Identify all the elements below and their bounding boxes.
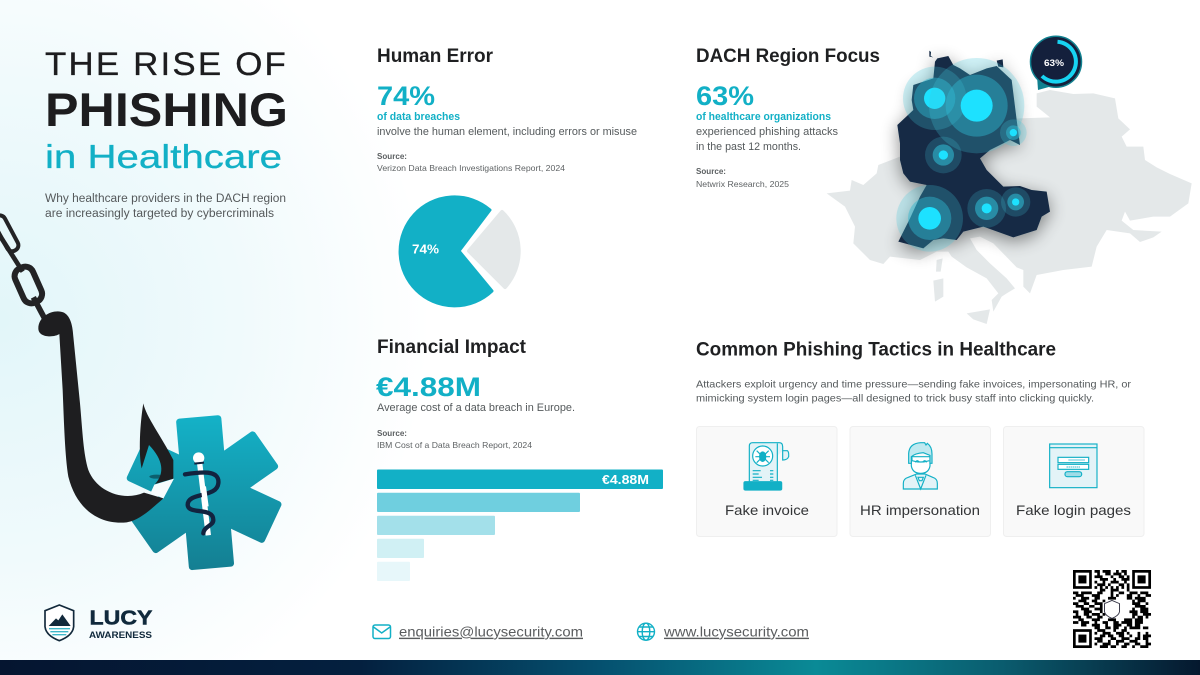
title: in Healthcare (45, 138, 282, 175)
stat: 63% (696, 81, 754, 111)
source: IBM Cost of a Data Breach Report, 2024 (377, 440, 532, 450)
card: fake invoice (696, 426, 837, 536)
source: Netwrix Research, 2025 (696, 179, 789, 189)
panel: financial impact (376, 337, 663, 581)
hotspot 3 (1000, 119, 1027, 146)
footer gradient bar (0, 660, 1200, 675)
QR code (1073, 571, 1151, 647)
chain (0, 213, 52, 332)
description: Attackers exploit urgency and time pressure—sending fake invoices, impersonating HR, or (696, 379, 1132, 391)
grey Europe (827, 90, 1192, 312)
source: Source: (696, 166, 726, 176)
panel: human error (377, 46, 637, 306)
hotspot 5 (896, 185, 963, 252)
stat: 74% (377, 81, 435, 111)
panel: DACH region focus (696, 46, 880, 189)
contact: website: www.lucysecurity.com (663, 624, 809, 640)
label: HR impersonation (860, 502, 980, 518)
bar chart: €4.88M (602, 473, 649, 487)
description: mimicking system login pages—all designed to trick busy staff into clicking quickly. (696, 393, 1094, 405)
icon: envelope (373, 625, 390, 638)
hotspot 6 (967, 189, 1006, 228)
icon: person in suit (903, 443, 937, 489)
panel: common phishing tactics (696, 340, 1144, 536)
Sicily (967, 309, 990, 324)
subtitle (45, 193, 286, 220)
title: THE RISE OF (45, 46, 288, 82)
logo: Lucy Awareness (45, 605, 153, 641)
map: Europe with DACH highlighted (827, 51, 1192, 324)
subtitle: Why healthcare providers in the DACH region (45, 193, 286, 205)
contact: email: enquiries@lucysecurity.com (399, 624, 583, 640)
stat label: of healthcare organizations (696, 111, 831, 123)
description: involve the human element, including errors or misuse (377, 126, 637, 138)
hook (38, 311, 163, 523)
source (377, 428, 532, 450)
card: fake login pages (1004, 426, 1144, 536)
pie chart: 74% (412, 242, 439, 256)
hotspot 2 (929, 58, 1024, 153)
source (377, 151, 565, 173)
heading: DACH Region Focus (696, 46, 880, 67)
source: Verizon Data Breach Investigations Report, 2024 (377, 163, 565, 173)
label: Fake invoice (725, 502, 809, 518)
Corsica (936, 258, 943, 272)
heading: Financial Impact (377, 337, 527, 358)
hook barb (140, 403, 173, 484)
heading: Human Error (377, 46, 494, 67)
Sardinia (933, 278, 943, 302)
subtitle: are increasingly targeted by cybercriminals (45, 208, 274, 220)
title (45, 46, 288, 175)
description: experienced phishing attacks (696, 126, 838, 138)
hotspot 7 (1001, 187, 1030, 217)
source (696, 166, 789, 189)
icon: invoice with bug (744, 443, 789, 490)
callout: 63% ring badge: 63% (1044, 58, 1065, 69)
source: Source: (377, 428, 407, 438)
stat: €4.88M (376, 372, 481, 402)
icon: login window (1050, 444, 1097, 488)
hotspot 1 (903, 67, 966, 130)
description: Average cost of a data breach in Europe. (377, 402, 575, 414)
callout: 63% ring badge (1030, 36, 1082, 90)
logo: Lucy Awareness: LUCY (90, 607, 153, 629)
icon: globe (638, 623, 654, 640)
icon: shield (45, 605, 74, 641)
description (696, 126, 838, 153)
stat label: of data breaches (377, 111, 460, 123)
title: PHISHING (45, 83, 288, 136)
logo: Lucy Awareness: AWARENESS (89, 630, 152, 641)
source: Source: (377, 151, 407, 161)
icon: QR centre shield (1104, 600, 1120, 618)
illustration: hook and star of life (0, 213, 290, 577)
bar chart (377, 470, 663, 581)
label: Fake login pages (1016, 502, 1131, 518)
DACH region (897, 51, 1050, 248)
hotspot 4 (925, 137, 962, 173)
star of life (126, 415, 282, 570)
heading: Common Phishing Tactics in Healthcare (696, 340, 1056, 361)
card: HR impersonation (850, 426, 990, 536)
pie chart (400, 197, 519, 306)
description: in the past 12 months. (696, 141, 801, 153)
description (696, 379, 1132, 405)
